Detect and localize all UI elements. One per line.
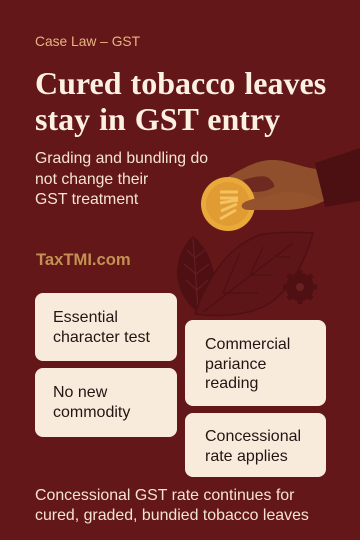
card: essential character test xyxy=(35,293,177,361)
subtitle: not change their xyxy=(35,170,148,188)
icon: small leaf xyxy=(177,236,214,312)
icon: thumb xyxy=(242,192,324,210)
card: no new commodity xyxy=(35,368,177,437)
card: essential character test: Essential xyxy=(53,309,118,326)
title xyxy=(35,65,326,137)
footer text: Concessional GST rate continues for xyxy=(35,487,294,504)
card: essential character test: character test xyxy=(53,328,150,346)
icon: large leaf xyxy=(195,232,313,315)
icon: fingers xyxy=(243,176,274,192)
card: no new commodity: commodity xyxy=(53,404,130,420)
icon: coin xyxy=(201,177,255,231)
icon: hand xyxy=(226,160,324,210)
title: Cured tobacco leaves xyxy=(35,65,326,101)
subtitle: Grading and bundling do xyxy=(35,150,208,167)
card: concessional rate applies xyxy=(185,413,326,477)
title: stay in GST entry xyxy=(35,101,280,137)
card: commercial pariance reading: reading xyxy=(205,375,258,392)
eyebrow label: Case Law – GST xyxy=(35,34,140,49)
subtitle xyxy=(35,150,208,208)
brand: TaxTMI.com xyxy=(36,250,131,269)
card: concessional rate applies: rate applies xyxy=(205,448,288,464)
subtitle: GST treatment xyxy=(35,191,138,208)
card: concessional rate applies: Concessional xyxy=(205,428,301,445)
icon: gear xyxy=(283,270,317,304)
footer text xyxy=(35,487,309,524)
card: commercial pariance reading: pariance xyxy=(205,356,266,372)
card: no new commodity: No new xyxy=(53,384,107,401)
footer text: cured, graded, bundied tobacco leaves xyxy=(35,507,309,524)
icon: sleeve xyxy=(315,148,360,207)
card: commercial pariance reading: Commercial xyxy=(205,336,290,353)
card: commercial pariance reading xyxy=(185,320,326,406)
